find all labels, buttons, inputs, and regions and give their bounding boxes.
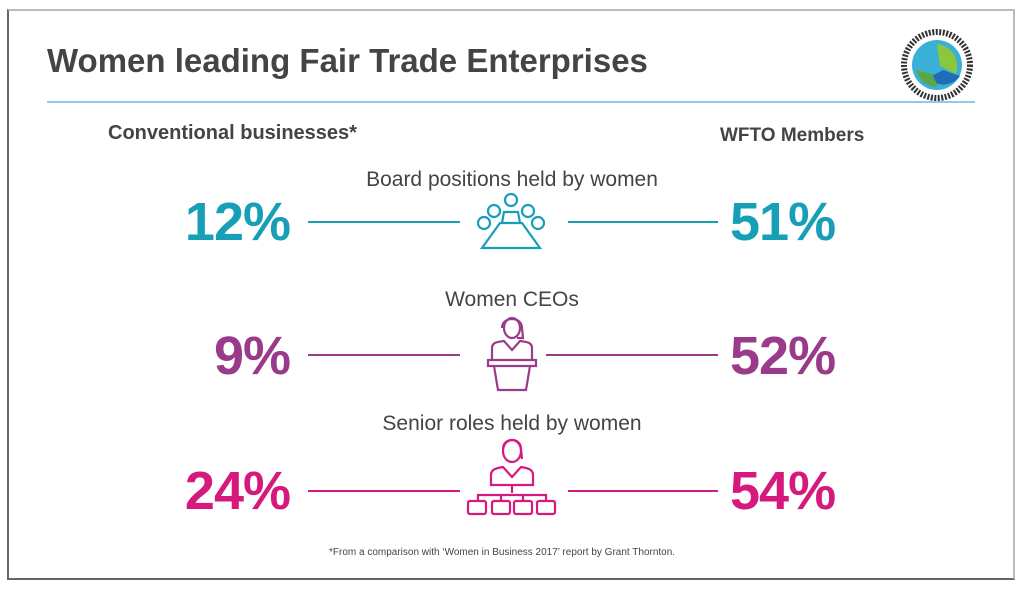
row: senior roles [185,412,835,521]
left number: 24% [185,461,290,521]
right number: 52% [730,326,835,386]
heading: WFTO: WFTO Members [720,125,864,146]
footnote: *From a comparison with ‘Women in Business 2017’ report by Grant Thornton. [329,547,675,558]
right number: 51% [730,192,835,252]
label: Board positions held by women [366,168,658,191]
left number: 12% [185,192,290,252]
title: Women leading Fair Trade Enterprises [47,42,648,79]
heading: conventional: Conventional businesses* [108,122,357,144]
row: board [185,168,835,252]
left number: 9% [214,326,290,386]
label: Women CEOs [445,288,579,311]
right number: 54% [730,461,835,521]
icon: podium [486,316,538,392]
divider [47,101,975,103]
label: Senior roles held by women [382,412,642,435]
icon: board table [476,192,546,250]
icon: org chart [466,438,556,516]
row: CEOs [214,288,835,392]
logo [901,29,973,101]
